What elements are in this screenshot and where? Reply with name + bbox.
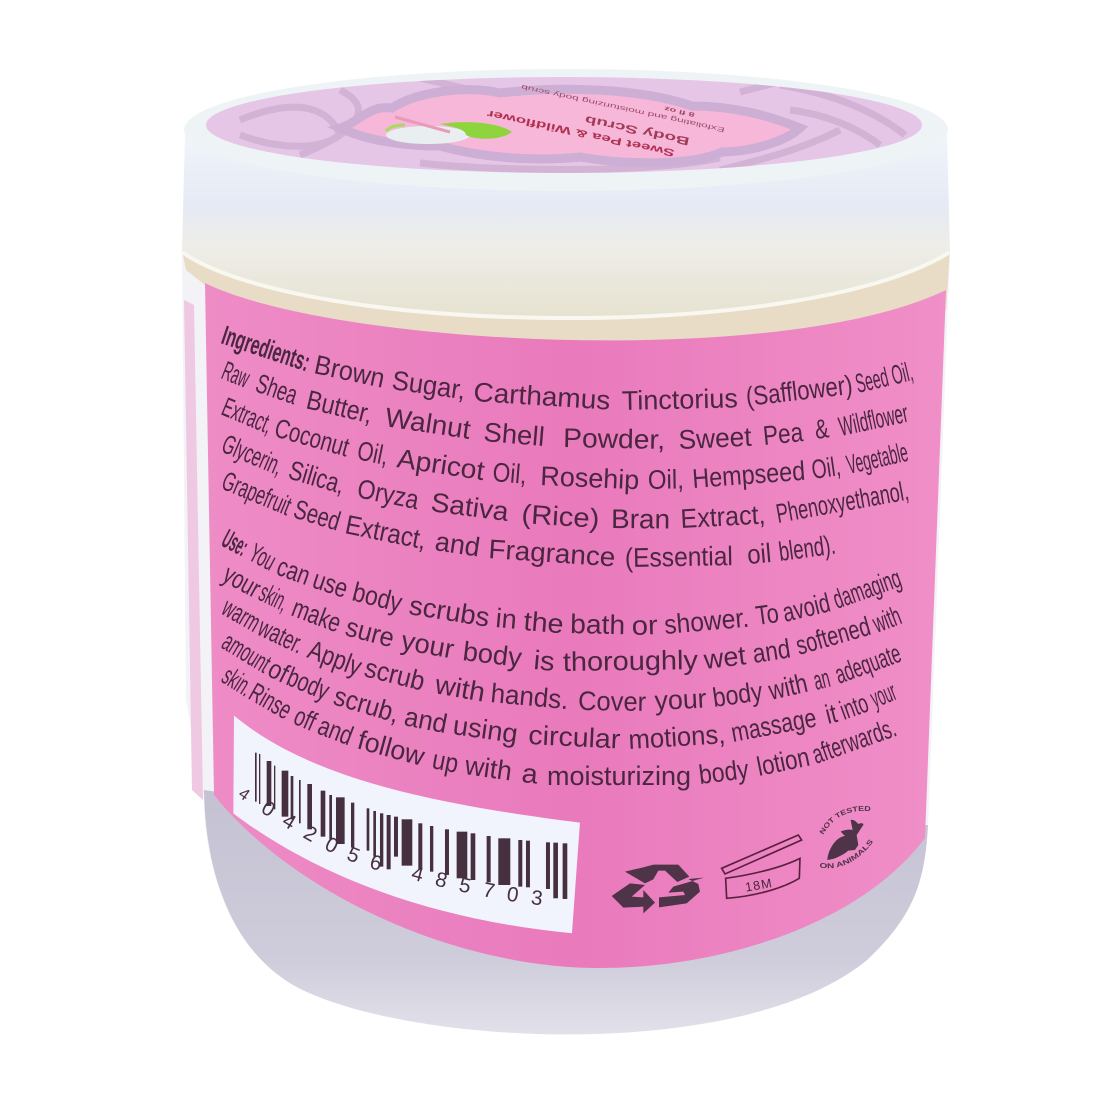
ingredients text block: Oryza — [355, 473, 422, 515]
upside-down product text — [485, 83, 725, 159]
ingredients text block: Butter, — [304, 385, 376, 429]
use instructions text block: hands. — [489, 678, 570, 715]
icon: recycling symbol — [612, 865, 704, 913]
use instructions text block: thoroughly — [563, 645, 699, 677]
use instructions text block: it — [822, 698, 841, 730]
ingredients text block: Grapefruit — [218, 466, 296, 521]
ingredients text block: Bran — [611, 504, 670, 535]
ingredients text block: Fragrance — [488, 534, 616, 572]
icon: period after opening 18M — [722, 835, 802, 898]
lower frosted base — [204, 790, 928, 1034]
ingredients text block: Apricot — [395, 443, 487, 486]
use instructions text block: warm — [216, 592, 266, 638]
use instructions text block: off — [290, 701, 321, 737]
barcode panel — [233, 716, 580, 934]
ingredients text block: Extract, — [680, 500, 766, 534]
upside-down product text: Exfoliating and moisturizing body scrub — [521, 83, 725, 133]
use instructions text block: a — [520, 758, 540, 790]
jar body — [182, 250, 950, 1034]
ingredients text block: Sugar, — [390, 365, 468, 405]
ingredients text block: Shea — [252, 368, 302, 410]
ingredients text block: Rosehip — [540, 461, 640, 495]
ingredients text block: Silica, — [285, 455, 348, 500]
use instructions text block: To — [754, 598, 781, 631]
use instructions text block: your — [399, 625, 456, 664]
use instructions text block: skin, — [254, 577, 294, 617]
ingredients text block: Vegetable — [844, 437, 911, 480]
ingredients text block: Phenoxyethanol, — [774, 476, 911, 529]
ingredients text block: (Rice) — [521, 499, 600, 534]
use instructions text block: Rinse — [244, 677, 297, 725]
use instructions text block: afterwards. — [808, 713, 900, 770]
lid top — [184, 69, 948, 191]
icon: not tested on animals rabbit: NOT TESTED — [820, 806, 870, 834]
use instructions text block: shower. — [663, 603, 750, 640]
ingredients text block: Walnut — [383, 402, 473, 445]
ingredients text block: Extract, — [343, 509, 429, 555]
ingredients text block: Raw — [218, 356, 254, 394]
use instructions text block: body — [711, 676, 765, 713]
use instructions text block: of — [263, 654, 294, 689]
use instructions text block: into — [836, 688, 872, 726]
ingredients text block: Glycerin, — [218, 429, 287, 481]
ingredients text block: Oil, — [648, 464, 684, 495]
use instructions text block: an — [810, 663, 833, 696]
use instructions text block: massage — [729, 703, 819, 748]
logo — [386, 117, 512, 144]
use instructions text block: You — [244, 538, 281, 576]
lid rim highlight — [182, 252, 950, 318]
use instructions text block: and — [402, 701, 450, 739]
use instructions text block: your — [866, 676, 900, 714]
use instructions text block: your — [654, 683, 707, 716]
use instructions text block: Apply — [304, 635, 366, 682]
use instructions text block: body — [461, 636, 524, 673]
ingredients text block: Oil, — [355, 435, 391, 471]
use instructions text block: Cover — [578, 686, 646, 717]
pink back label — [205, 283, 946, 968]
use instructions text block: with — [432, 669, 487, 708]
barcode digits: 4 — [235, 784, 253, 805]
ingredients text block: Hempseed — [691, 456, 806, 494]
ingredients text block: Sativa — [429, 487, 511, 527]
use instructions text block: with — [765, 668, 810, 706]
ingredients text block: Ingredients: — [218, 320, 314, 377]
barcode digits: 042056 485703 — [262, 802, 542, 905]
use instructions text block: damaging — [829, 563, 905, 615]
use instructions text block: body — [283, 662, 334, 706]
icon: not tested on animals rabbit: ON ANIMALS — [820, 840, 872, 868]
use instructions text block: up — [430, 744, 461, 779]
ingredients text block: Pea — [762, 417, 805, 451]
use instructions text block: scrub — [362, 653, 428, 697]
use instructions text block: is — [532, 645, 556, 677]
use instructions text block: with — [868, 601, 905, 639]
use instructions text block: scrub, — [330, 681, 403, 729]
use instructions text block: with — [462, 750, 514, 786]
ingredients text block: Coconut — [271, 413, 353, 463]
use instructions text block: body — [350, 577, 406, 618]
upside-down product text: 8 fl oz — [663, 105, 695, 118]
use instructions text block: adequate — [831, 638, 905, 690]
barcode bars — [255, 753, 567, 899]
cream band inside jar — [182, 250, 950, 341]
ingredients text block: Seed — [290, 494, 344, 536]
ingredients text block: Oil, — [491, 457, 528, 490]
use instructions text block: scrubs — [407, 590, 492, 633]
ingredients text block: Extract, — [218, 392, 277, 440]
ingredients text block: (Safflower) — [744, 370, 854, 412]
use instructions text block: the — [522, 606, 565, 639]
use instructions text block: can — [273, 551, 314, 591]
use instructions text block: wet — [701, 640, 748, 675]
use instructions text block: make — [288, 593, 345, 638]
ingredients text block — [218, 320, 916, 573]
ingredients text block: Oil, — [810, 451, 843, 485]
upside-down product text: Sweet Pea & Wildflower — [485, 108, 675, 159]
damask pattern — [240, 74, 905, 170]
use instructions text block: Use: — [217, 524, 253, 562]
icon: not tested on animals rabbit — [820, 806, 872, 868]
product photo: jar back view — [181, 69, 951, 1034]
ingredients text block: Tinctorius — [621, 383, 738, 416]
use instructions text block: circular — [528, 720, 621, 754]
plaque — [340, 89, 800, 163]
use instructions text block: sure — [342, 612, 397, 653]
use instructions text block: softened — [792, 611, 874, 661]
use instructions text block: follow — [354, 725, 428, 772]
use instructions text block: moisturizing — [547, 761, 691, 791]
top label on lid — [206, 74, 922, 173]
left glass strip — [184, 300, 203, 800]
use instructions text block: in — [494, 603, 518, 635]
jar lid — [182, 69, 950, 319]
use instructions text block: avoid — [779, 588, 833, 628]
use instructions text block: using — [451, 710, 520, 749]
use instructions text block: and — [750, 634, 792, 669]
ingredients text block: & — [813, 413, 831, 445]
use instructions text block: your — [218, 559, 266, 604]
use instructions text block: or — [631, 610, 658, 641]
use instructions text block: amount — [217, 626, 276, 679]
use instructions text block: bath — [570, 609, 625, 640]
ingredients text block: and — [433, 526, 482, 563]
use instructions text block: use — [309, 564, 352, 604]
ingredients text block: Sweet — [678, 422, 753, 455]
use instructions text block: body — [697, 754, 751, 790]
use instructions text block: motions, — [628, 719, 726, 755]
use instructions text block: lotion — [754, 742, 812, 782]
ingredients text block: Carthamus — [473, 377, 611, 416]
use instructions text block — [216, 524, 905, 791]
ingredients text block: oil — [746, 538, 772, 570]
icon: period after opening 18M: 18M — [744, 876, 774, 895]
use instructions text block: water. — [253, 612, 309, 659]
ingredients text block: Brown — [312, 350, 387, 394]
upside-down product text: Body Scrub — [584, 113, 691, 147]
ingredients text block: Powder, — [563, 423, 665, 455]
use instructions text block: skin. — [217, 661, 258, 702]
ingredients text block: Seed Oil, — [853, 356, 916, 399]
ingredients text block: (Essential — [625, 541, 733, 573]
ingredients text block: Wildflower — [836, 398, 911, 442]
ingredients text block: blend). — [777, 530, 837, 567]
ingredients text block: Shell — [483, 417, 546, 452]
use instructions text block: and — [314, 711, 357, 751]
